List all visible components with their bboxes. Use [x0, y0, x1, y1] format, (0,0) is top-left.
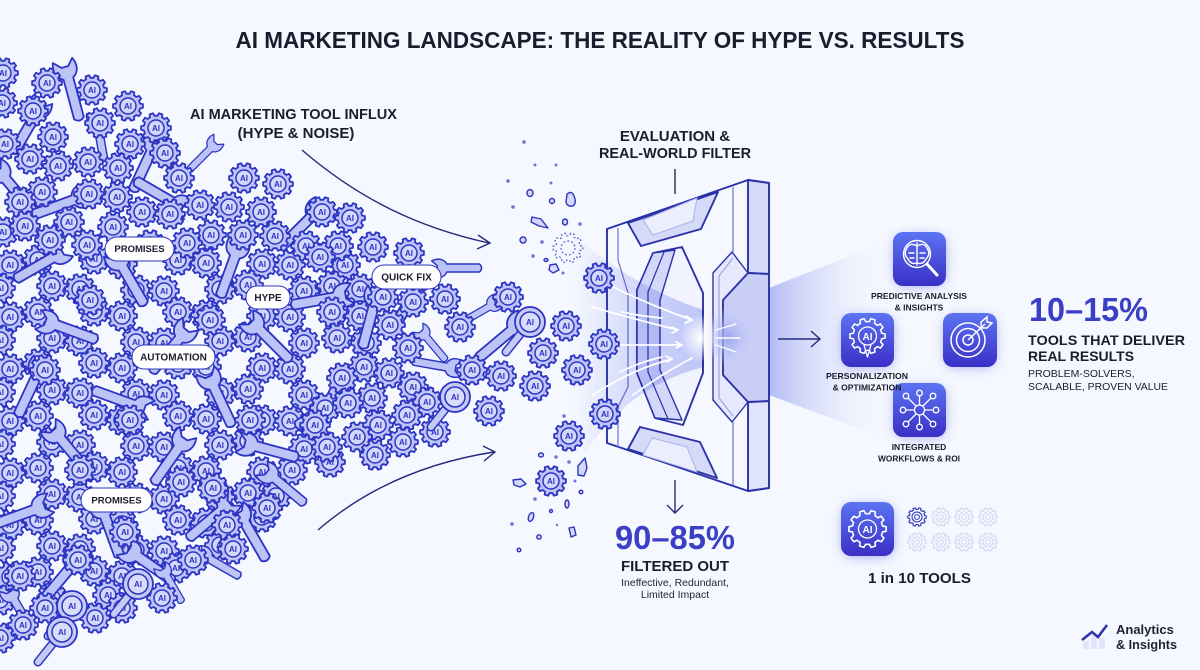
ratio: 1 in 10 tools — [841, 502, 997, 587]
label: integrated workflows: INTEGRATED — [892, 442, 946, 452]
pill: hype: HYPE — [254, 293, 282, 304]
pill: promises lower: PROMISES — [91, 496, 142, 506]
filter pointer line — [674, 169, 676, 194]
label: integrated workflows — [878, 442, 960, 464]
label: personalization: PERSONALIZATION — [826, 371, 908, 381]
bottom panel — [628, 427, 717, 478]
tile: predictive analysis — [893, 232, 946, 286]
arrow: filtered down — [667, 480, 683, 513]
wrenches layer — [0, 57, 532, 635]
label: integrated workflows: WORKFLOWS & ROI — [878, 454, 960, 464]
logo text: Analytics — [1116, 622, 1174, 637]
back gears layer — [0, 244, 393, 615]
left strut — [637, 250, 682, 420]
beam out of filter — [769, 238, 895, 442]
tile: target — [943, 313, 997, 367]
pill: promises upper: PROMISES — [114, 244, 165, 255]
particles — [506, 140, 582, 526]
tile: personalization — [841, 313, 894, 367]
stat: real results: REAL RESULTS — [1028, 348, 1134, 364]
influx heading: (HYPE & NOISE) — [238, 125, 354, 142]
stat: real results: SCALABLE, PROVEN VALUE — [1028, 381, 1168, 393]
right column lower — [748, 401, 769, 491]
pill: promises lower — [81, 488, 152, 512]
escaping gears — [536, 263, 620, 496]
top panel — [628, 192, 718, 246]
inner aperture — [637, 247, 703, 425]
logo — [1082, 622, 1177, 652]
influx heading — [190, 106, 397, 142]
block glow — [702, 307, 754, 367]
icon: ai gear pin: AI — [862, 332, 873, 343]
evaluation heading: REAL-WORLD FILTER — [599, 145, 751, 162]
dissolving gear — [553, 233, 583, 263]
pill: quick fix: QUICK FIX — [381, 272, 432, 284]
icon: network hub — [900, 390, 939, 430]
stat: real results: PROBLEM-SOLVERS, — [1028, 368, 1135, 380]
tile: ai gear — [841, 502, 894, 556]
logo text — [1116, 622, 1177, 652]
label: predictive analysis: PREDICTIVE ANALYSIS — [871, 291, 967, 301]
frame body — [607, 180, 769, 491]
evaluation heading — [599, 128, 751, 162]
magnifier tools — [38, 307, 545, 662]
front gears layer — [0, 58, 558, 653]
stat: real results: 10–15% — [1029, 291, 1148, 328]
right center block — [723, 273, 769, 402]
label: predictive analysis — [871, 291, 967, 312]
label: personalization — [826, 371, 908, 392]
center light flare — [680, 314, 720, 362]
stat: filtered out: Limited Impact — [641, 589, 709, 601]
right column upper — [748, 180, 769, 274]
gear tally — [908, 508, 997, 551]
pill: automation — [132, 345, 215, 369]
icon: target with arrow — [951, 317, 992, 357]
evaluation heading: EVALUATION & — [620, 128, 730, 145]
label: personalization: & OPTIMIZATION — [833, 382, 901, 392]
logo text: & Insights — [1116, 637, 1177, 652]
side strip lines — [618, 228, 628, 447]
arrow: upper influx — [302, 150, 490, 249]
stat: filtered out: Ineffective, Redundant, — [621, 577, 729, 589]
right inner wing — [713, 252, 748, 422]
logo mark — [1082, 625, 1107, 649]
pill: quick fix — [372, 265, 441, 289]
filter frame — [607, 180, 769, 491]
tile: integrated workflows — [893, 383, 946, 437]
ratio label: 1 in 10 TOOLS — [868, 570, 971, 587]
tool mass: wrenches and AI gears — [0, 57, 558, 662]
stat: filtered out: 90–85% — [615, 519, 735, 556]
tile: ai gear: AI — [862, 525, 873, 536]
influx heading: AI MARKETING TOOL INFLUX — [190, 106, 397, 123]
icon: brain magnifier — [904, 240, 937, 275]
white light arrows — [592, 287, 740, 395]
debris — [506, 140, 587, 552]
arrow: lower influx — [318, 446, 495, 530]
hollow fragments — [513, 190, 587, 552]
pill: automation: AUTOMATION — [140, 352, 207, 364]
pill: hype — [246, 286, 290, 309]
stat: filtered out: FILTERED OUT — [621, 558, 729, 575]
title: AI MARKETING LANDSCAPE: THE REALITY OF HYPE VS. RESULTS — [236, 27, 964, 53]
light beam through filter — [552, 238, 704, 452]
label: predictive analysis: & INSIGHTS — [895, 302, 944, 312]
arrow: to results — [778, 331, 820, 347]
stat: real results: TOOLS THAT DELIVER — [1028, 332, 1185, 348]
stat: real results — [1028, 291, 1185, 393]
stat: filtered out — [615, 519, 735, 601]
pill: promises upper — [105, 237, 174, 261]
